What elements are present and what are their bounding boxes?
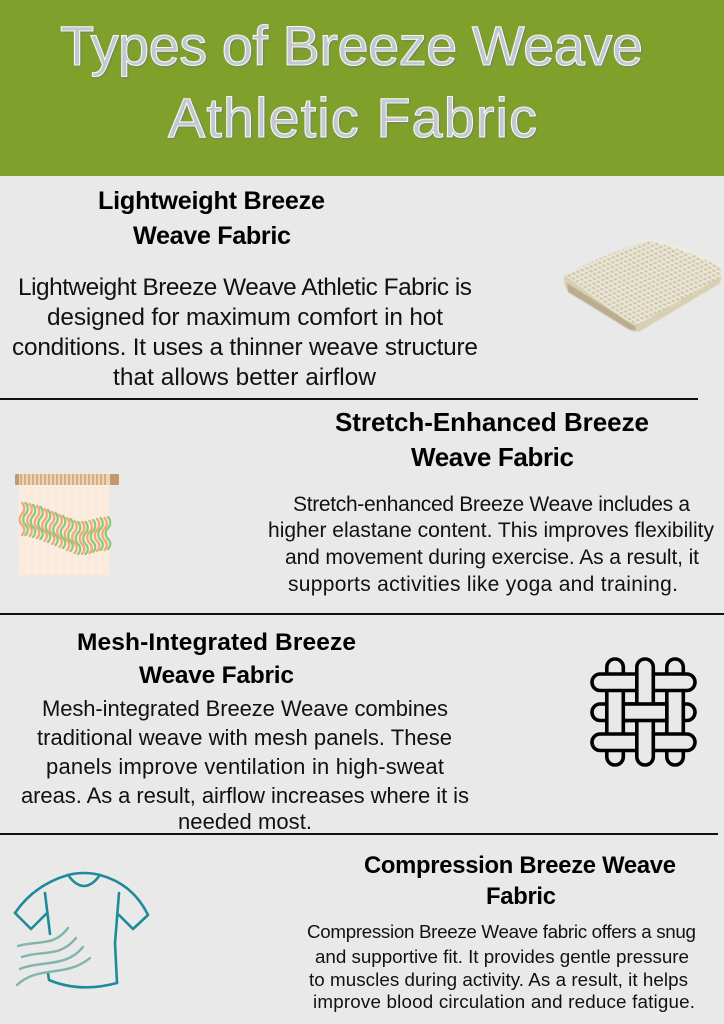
title: Types of Breeze Weave [60, 14, 643, 77]
heading: stretch-enhanced: Weave Fabric [411, 442, 574, 472]
heading: stretch-enhanced [335, 407, 649, 472]
text: compression description: to muscles during activity. As a result, it helps [309, 969, 688, 990]
heading: compression: Fabric [486, 883, 556, 910]
divider 3 [0, 833, 718, 835]
header banner [0, 0, 724, 176]
text: mesh-integrated description: areas. As a result, airflow increases where it is [21, 783, 469, 808]
icon: t-shirt with air waves [15, 873, 148, 987]
text: lightweight description: that allows better airflow [113, 364, 376, 391]
heading: stretch-enhanced: Stretch-Enhanced Breeze [335, 407, 649, 437]
icon: basket weave [592, 659, 695, 765]
heading: lightweight [98, 187, 325, 250]
text: compression description: and supportive fit. It provides gentle pressure [315, 946, 689, 967]
text: mesh-integrated description [21, 696, 469, 834]
text: compression description: improve blood circulation and reduce fatigue. [313, 991, 695, 1012]
text: stretch-enhanced description [268, 493, 714, 596]
heading: mesh-integrated: Weave Fabric [139, 662, 294, 689]
text: stretch-enhanced description: higher elastane content. This improves flexibility [268, 519, 714, 542]
text: lightweight description: designed for maximum comfort in hot [47, 304, 443, 331]
text: lightweight description: Lightweight Breeze Weave Athletic Fabric is [18, 274, 472, 301]
title [60, 14, 643, 149]
text: compression description [307, 921, 696, 1012]
section: mesh-integrated fabric [21, 629, 695, 834]
heading: mesh-integrated: Mesh-Integrated Breeze [77, 629, 356, 656]
section: stretch-enhanced fabric [15, 407, 714, 596]
text: lightweight description: conditions. It uses a thinner weave structure [12, 334, 478, 361]
section: compression fabric [15, 852, 696, 1012]
icon: folded waffle towel [564, 240, 721, 332]
text: compression description: Compression Breeze Weave fabric offers a snug [307, 921, 696, 942]
section: lightweight fabric [12, 187, 721, 391]
heading: lightweight: Lightweight Breeze [98, 187, 325, 215]
divider 2 [0, 613, 724, 615]
text: stretch-enhanced description: supports activities like yoga and training. [288, 573, 678, 596]
text: mesh-integrated description: panels improve ventilation in high-sweat [46, 754, 444, 779]
text: lightweight description [12, 274, 478, 391]
title: Athletic Fabric [168, 86, 537, 149]
text: mesh-integrated description: traditional weave with mesh panels. These [37, 725, 452, 750]
icon: loom with wavy weave [15, 474, 119, 575]
heading: compression [364, 852, 676, 910]
text: mesh-integrated description: Mesh-integrated Breeze Weave combines [42, 696, 448, 721]
heading: compression: Compression Breeze Weave [364, 852, 676, 879]
text: mesh-integrated description: needed most. [178, 809, 312, 834]
text: stretch-enhanced description: and movement during exercise. As a result, it [285, 546, 699, 569]
heading: mesh-integrated [77, 629, 356, 689]
text: stretch-enhanced description: Stretch-enhanced Breeze Weave includes a [293, 493, 690, 516]
heading: lightweight: Weave Fabric [133, 222, 291, 250]
divider 1 [0, 398, 698, 400]
